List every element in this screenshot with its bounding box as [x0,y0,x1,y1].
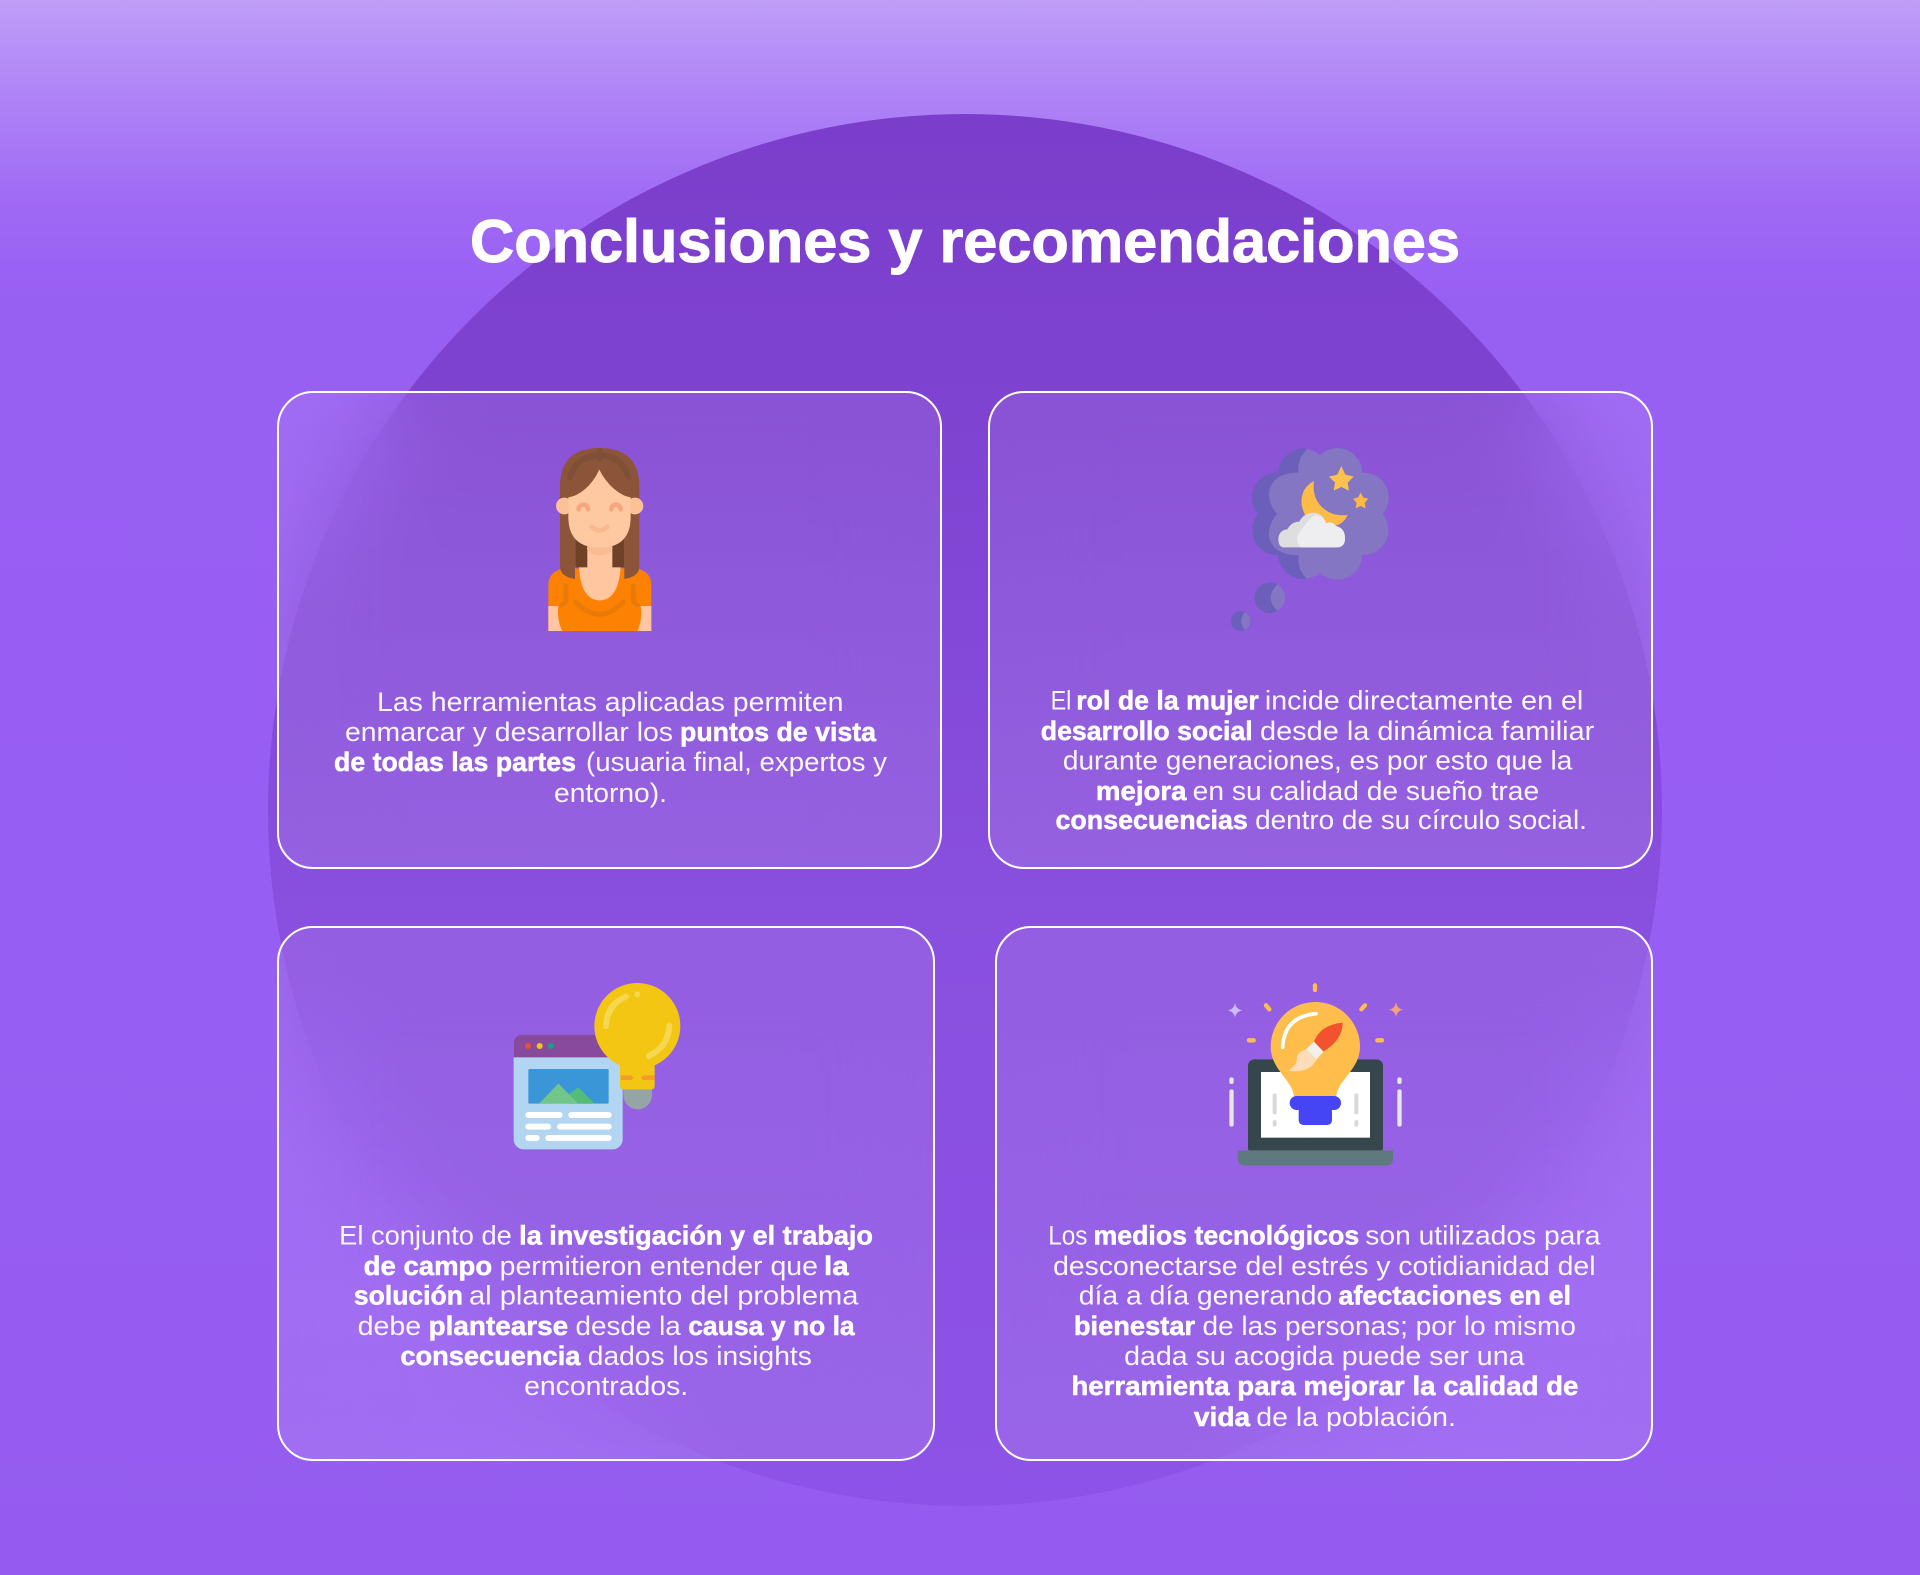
text: medios tecnológicos [1048,1221,1601,1432]
text: medios tecnológicos: desconectarse del estrés y cotidianidad del [1053,1251,1596,1281]
panel: herramientas [277,391,942,869]
text: investigación: debe [358,1311,421,1341]
text: medios tecnológicos: son utilizados para [1365,1221,1601,1251]
text: medios tecnológicos: bienestar [1074,1311,1195,1341]
text: rol de la mujer: mejora [1096,776,1187,806]
panel: investigación [277,926,935,1461]
text: investigación: al planteamiento del problema [469,1281,859,1311]
text: rol de la mujer: consecuencias [1056,805,1248,835]
text: herramientas [334,687,888,808]
text: investigación: El conjunto de [339,1221,512,1251]
text: investigación: permitieron entender que [500,1251,818,1281]
text: investigación: encontrados. [524,1371,688,1401]
text: rol de la mujer: incide directamente en el [1265,686,1583,716]
text: rol de la mujer: desde la dinámica familiar [1260,716,1594,746]
text: rol de la mujer [1041,686,1594,835]
text: herramientas: enmarcar y desarrollar los [345,717,673,747]
panel: medios tecnológicos [995,926,1653,1461]
text: medios tecnológicos: de la población. [1256,1402,1456,1432]
text: investigación: solución [354,1281,463,1311]
text: rol de la mujer: durante generaciones, es por esto que la [1063,746,1573,776]
text: investigación [339,1221,873,1401]
text: rol de la mujer: desarrollo social [1041,716,1253,746]
text: investigación: la investigación y el trabajo [519,1221,873,1251]
text: medios tecnológicos: afectaciones en el [1338,1281,1571,1311]
text: medios tecnológicos: Los [1048,1221,1087,1251]
text: investigación: causa y no la [688,1311,855,1341]
text: medios tecnológicos: herramienta para mejorar la calidad de [1071,1371,1578,1401]
text: investigación: consecuencia [400,1341,581,1371]
text: rol de la mujer: El [1051,686,1071,716]
text: herramientas: de todas las partes [334,747,576,777]
panel: rol de la mujer [988,391,1653,869]
text: medios tecnológicos: vida [1194,1402,1250,1432]
icon: laptop with creative bulb [1228,985,1403,1166]
icon: thought cloud with moon [1231,448,1389,631]
text: herramientas: entorno). [554,778,667,808]
text: rol de la mujer: rol de la mujer [1076,686,1259,716]
text: investigación: plantearse [429,1311,568,1341]
text: medios tecnológicos: dada su acogida puede ser una [1124,1341,1525,1371]
text: rol de la mujer: dentro de su círculo social. [1255,805,1587,835]
text: medios tecnológicos: medios tecnológicos [1094,1221,1359,1251]
icon: browser window and light bulb [514,983,680,1149]
text: investigación: de campo [364,1251,492,1281]
background circle [268,114,1662,1506]
text: herramientas: (usuaria final, expertos y [586,747,888,777]
icon: woman [548,448,651,631]
text: medios tecnológicos: día a día generando [1079,1281,1332,1311]
text: herramientas: Las herramientas aplicadas permiten [377,687,844,717]
text: investigación: desde la [576,1311,681,1341]
text: medios tecnológicos: de las personas; por lo mismo [1202,1311,1576,1341]
text: investigación: la [824,1251,849,1281]
text: rol de la mujer: en su calidad de sueño trae [1193,776,1539,806]
text: investigación: dados los insights [588,1341,812,1371]
title: Conclusiones y recomendaciones [470,208,1460,275]
text: herramientas: puntos de vista [680,717,876,747]
